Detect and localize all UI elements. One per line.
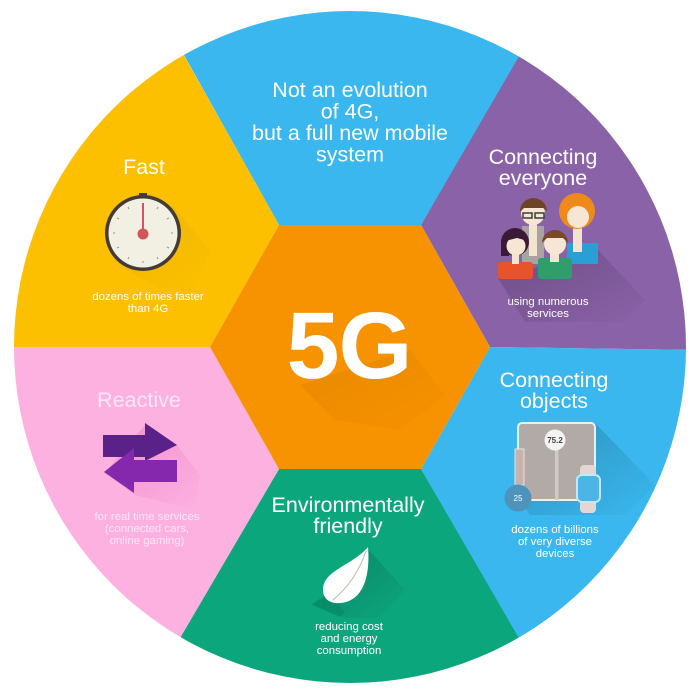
icon: stopwatch <box>105 193 183 271</box>
title: 5G: 5G <box>287 293 411 399</box>
thermometer <box>515 449 524 485</box>
heading: connecting everyone: Connecting <box>489 145 597 169</box>
panel: environmentally friendly <box>180 469 520 700</box>
panel: connecting objects <box>421 347 686 638</box>
icon: connected devices: 25 <box>514 494 523 503</box>
center hexagon <box>210 225 490 469</box>
icon: arrows <box>103 423 196 502</box>
caption: dozens of billions: devices <box>536 548 575 560</box>
panel: top blue <box>184 11 520 225</box>
heading: environmentally friendly: Environmentally <box>272 493 425 517</box>
caption: dozens of billions: dozens of billions <box>511 524 599 536</box>
icon: family <box>498 193 645 322</box>
caption: for real time services: online gaming) <box>110 535 185 547</box>
caption: for real time services: for real time services <box>94 511 200 523</box>
icon: connected devices <box>504 423 655 515</box>
heading: not an evolution: of 4G, <box>321 100 379 124</box>
caption: reducing cost: reducing cost <box>315 621 384 633</box>
heading: environmentally friendly: friendly <box>313 514 383 538</box>
scale <box>518 423 595 500</box>
caption: for real time services: (connected cars, <box>105 523 189 535</box>
panel: reactive <box>14 347 279 637</box>
caption: using numerous services: services <box>527 308 569 320</box>
panel: connecting everyone <box>421 56 686 350</box>
heading: connecting everyone: everyone <box>499 166 587 190</box>
caption: dozens of times faster: dozens of times faster <box>92 291 204 303</box>
heading: connecting objects: objects <box>520 389 588 413</box>
icon: connected devices: 75.2 <box>547 436 563 445</box>
caption: using numerous services: using numerous <box>507 296 589 308</box>
icon: leaf <box>312 547 405 618</box>
caption: dozens of times faster: than 4G <box>128 303 168 315</box>
caption: dozens of billions: of very diverse <box>518 536 592 548</box>
heading: not an evolution: system <box>316 142 384 166</box>
caption: reducing cost: consumption <box>317 645 381 657</box>
heading: reactive: Reactive <box>97 388 181 412</box>
panel: fast <box>14 55 279 347</box>
heading: connecting objects: Connecting <box>500 368 608 392</box>
heading: not an evolution: but a full new mobile <box>252 121 448 145</box>
heading: not an evolution: Not an evolution <box>272 78 428 102</box>
heading: fast: Fast <box>123 155 165 179</box>
caption: reducing cost: and energy <box>320 633 378 645</box>
watch <box>580 465 596 513</box>
